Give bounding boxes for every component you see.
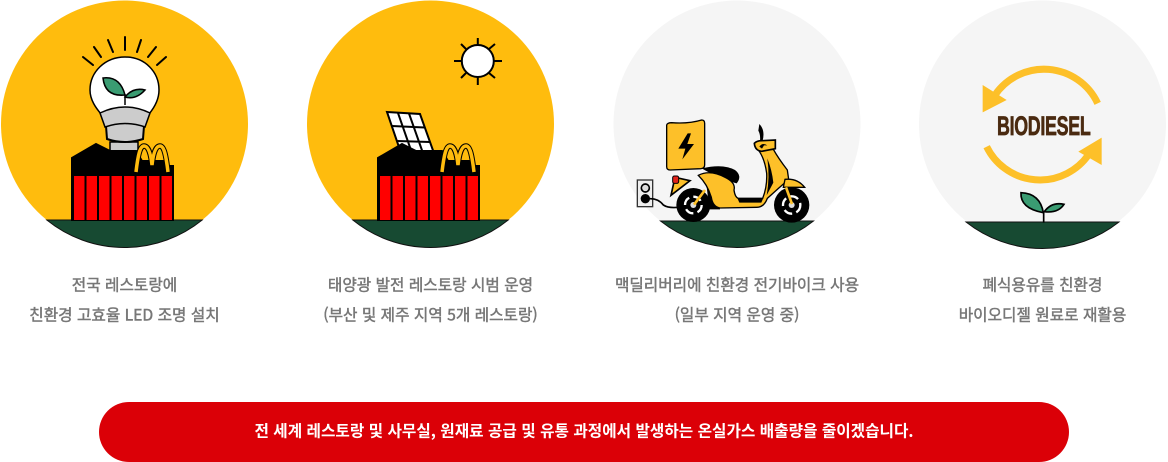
icon: electric scooter xyxy=(637,120,809,223)
panel: electric bike delivery xyxy=(614,0,860,248)
caption: LED lighting: 친환경 고효율 LED 조명 설치 xyxy=(29,302,220,326)
fork xyxy=(786,187,792,204)
ground xyxy=(660,221,814,248)
circle background: yellow xyxy=(307,0,554,248)
scooter body xyxy=(698,149,789,208)
footboard shadow xyxy=(737,198,763,203)
icon: light bulb with sprout xyxy=(90,57,159,151)
ground xyxy=(966,222,1119,249)
ground xyxy=(353,220,508,248)
handlebar xyxy=(754,140,775,151)
ground xyxy=(47,220,202,248)
seat xyxy=(702,166,739,183)
panel: LED lighting xyxy=(1,0,248,248)
icon: sun xyxy=(454,38,502,85)
front fender xyxy=(783,179,805,187)
mirror xyxy=(758,124,763,141)
caption: biodiesel recycling: 바이오디젤 원료로 재활용 xyxy=(959,302,1126,326)
icon: light rays xyxy=(83,37,166,65)
front wheel xyxy=(774,187,809,223)
lightning bolt xyxy=(678,133,694,159)
caption: solar power xyxy=(323,272,538,326)
caption: electric bike delivery: (일부 지역 운영 중) xyxy=(675,302,799,326)
panel: solar power xyxy=(307,0,554,248)
icon: sprout xyxy=(1021,193,1064,223)
caption: LED lighting: 전국 레스토랑에 xyxy=(72,272,177,296)
under body shadow xyxy=(707,187,720,209)
caption: electric bike delivery xyxy=(615,272,859,326)
rear wheel xyxy=(676,188,710,222)
icon: recycling arrows xyxy=(983,69,1102,180)
banner: greenhouse gas pledge: 전 세계 레스토랑 및 사무실, 원재료 공급 및 유통 과정에서 발생하는 온실가스 배출량을 줄이겠습니다. xyxy=(254,418,914,442)
rear light and fender xyxy=(671,177,690,195)
biodiesel wordmark: BIODIESEL xyxy=(997,110,1091,141)
circle background: light grey xyxy=(919,0,1166,248)
panel: biodiesel recycling xyxy=(919,0,1166,249)
circle background: yellow xyxy=(1,0,248,248)
caption: LED lighting xyxy=(29,272,220,326)
banner: greenhouse gas pledge xyxy=(99,402,1069,462)
caption: biodiesel recycling: 폐식용유를 친환경 xyxy=(983,272,1102,296)
circle background: light grey xyxy=(614,0,860,248)
caption: solar power: 태양광 발전 레스토랑 시범 운영 xyxy=(328,272,533,296)
building with golden arches xyxy=(378,144,479,220)
outlet and cord xyxy=(637,180,678,208)
rear swing arm xyxy=(694,190,705,205)
icon: solar panel xyxy=(387,112,435,156)
delivery box xyxy=(667,120,705,170)
caption: solar power: (부산 및 제주 지역 5개 레스토랑) xyxy=(323,302,538,326)
headlight detail xyxy=(759,144,767,149)
building with golden arches xyxy=(72,144,173,220)
caption: electric bike delivery: 맥딜리버리에 친환경 전기바이크 사용 xyxy=(615,272,859,296)
leg shield shadow xyxy=(767,158,773,195)
caption: biodiesel recycling xyxy=(959,272,1126,326)
